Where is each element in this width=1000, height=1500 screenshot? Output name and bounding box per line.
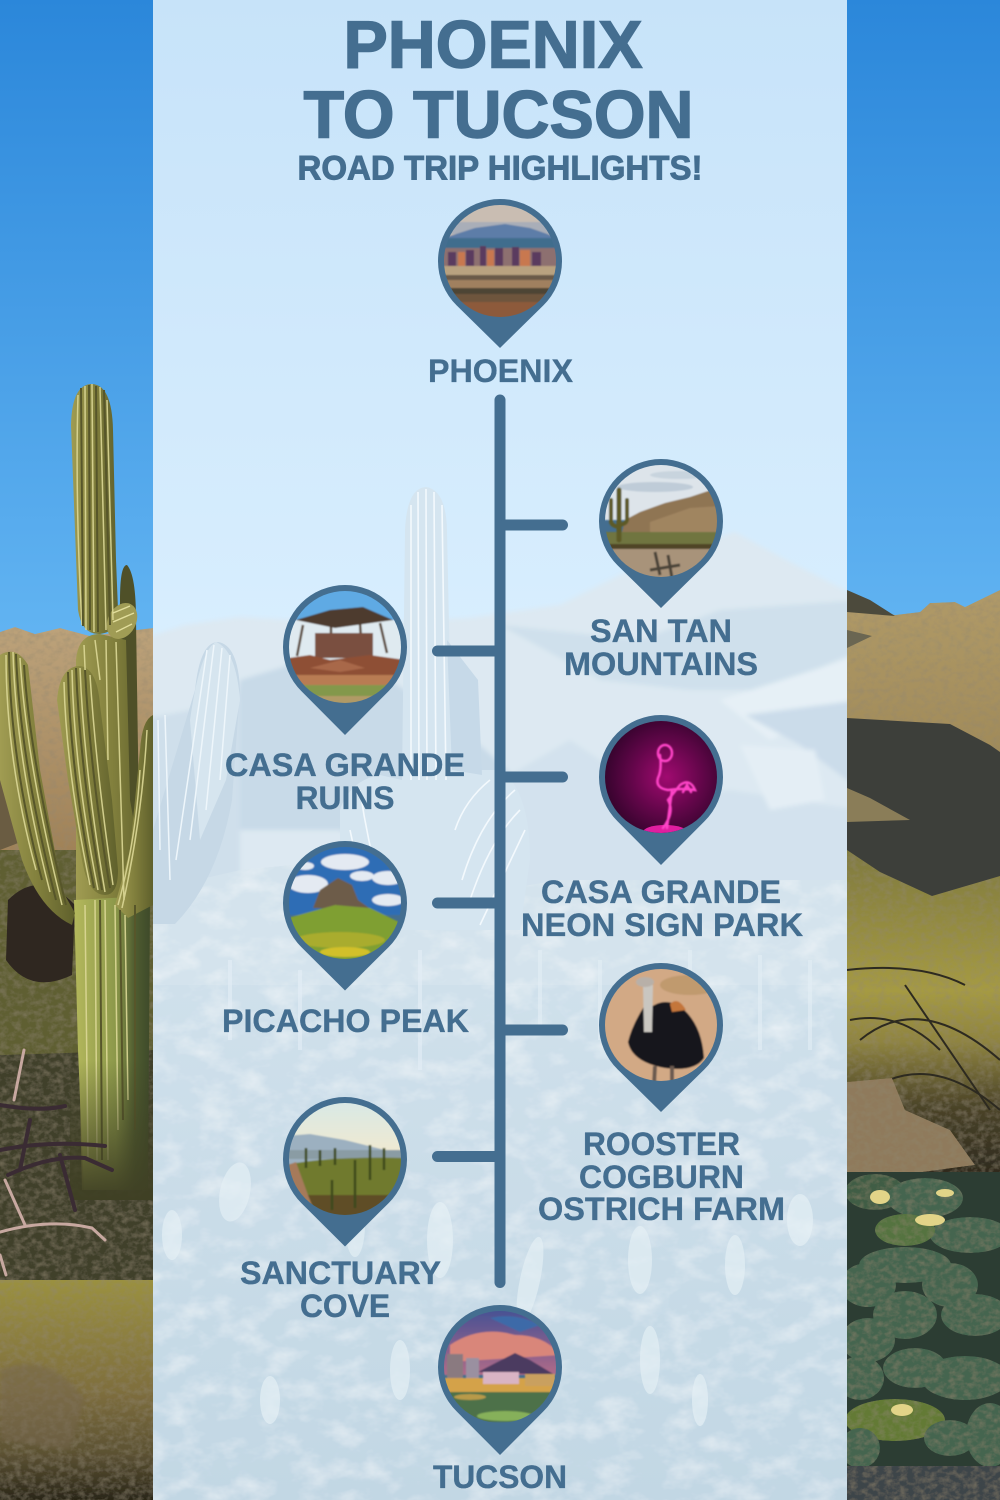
label: Rooster Cogburn Ostrich Farm: COGBURN	[579, 1159, 744, 1195]
label: Sanctuary Cove	[240, 1255, 441, 1324]
label: Picacho Peak: PICACHO PEAK	[222, 1003, 469, 1039]
label: Phoenix: PHOENIX	[428, 353, 574, 389]
label: Rooster Cogburn Ostrich Farm: OSTRICH FARM	[538, 1191, 785, 1227]
ghost saguaro centre	[340, 487, 530, 930]
label: Casa Grande Ruins: RUINS	[296, 780, 394, 816]
title: ROAD TRIP HIGHLIGHTS!	[298, 150, 702, 188]
title: TO TUCSON	[304, 78, 694, 152]
title	[298, 8, 702, 188]
panel: translucent route panel	[140, 0, 860, 1500]
label: Rooster Cogburn Ostrich Farm	[538, 1126, 785, 1227]
label: Tucson: TUCSON	[433, 1459, 567, 1495]
label: Casa Grande Neon Sign Park	[521, 874, 803, 943]
cholla	[847, 1078, 975, 1175]
right arm	[115, 715, 153, 918]
background: desert sky	[0, 0, 1000, 700]
timeline	[438, 400, 562, 1282]
highlights on pads	[870, 1189, 954, 1416]
label: San Tan Mountains: SAN TAN	[590, 613, 732, 649]
ghost saguaro left	[153, 642, 240, 924]
prickly pear cactus pads	[836, 1174, 1000, 1468]
middle arm	[57, 666, 118, 895]
hill shadow	[847, 718, 1000, 896]
ghost prickly pear pads	[162, 1160, 813, 1426]
pin: San Tan Mountains	[599, 459, 725, 608]
saguaro cactus	[0, 384, 153, 1200]
trunk	[76, 634, 133, 1187]
pin: Picacho Peak	[283, 841, 407, 990]
lower hillside and scrub	[847, 840, 1000, 1175]
pin: Tucson	[438, 1305, 562, 1455]
label: San Tan Mountains: MOUNTAINS	[564, 646, 758, 682]
label: Sanctuary Cove: SANCTUARY	[240, 1255, 441, 1291]
pin: Casa Grande Ruins	[283, 585, 407, 735]
ghost vertical cacti	[230, 950, 810, 1070]
ghost mountains	[153, 534, 847, 886]
label: Casa Grande Ruins	[225, 747, 465, 816]
label: Rooster Cogburn Ostrich Farm: ROOSTER	[583, 1126, 740, 1162]
icon: foreground branches	[0, 1050, 112, 1275]
textured foreground	[153, 985, 847, 1500]
label: San Tan Mountains	[564, 613, 758, 682]
tan mountain	[847, 590, 1000, 760]
pin: Rooster Cogburn Ostrich Farm	[599, 963, 723, 1112]
pin: Casa Grande Neon Sign Park	[599, 715, 723, 865]
title: PHOENIX	[344, 8, 643, 82]
cactus ribs	[6, 384, 147, 1160]
pin: Phoenix	[438, 199, 562, 348]
pin: Sanctuary Cove	[283, 1097, 407, 1246]
label: Casa Grande Neon Sign Park: CASA GRANDE	[541, 874, 781, 910]
label: Casa Grande Ruins: CASA GRANDE	[225, 747, 465, 783]
background: right desert scene	[836, 590, 1000, 1500]
left arm	[0, 652, 75, 925]
label: Casa Grande Neon Sign Park: NEON SIGN PARK	[521, 907, 803, 943]
upper column	[71, 384, 118, 634]
knob	[106, 603, 138, 639]
background: left desert scene	[0, 627, 153, 1500]
label: Sanctuary Cove: COVE	[300, 1288, 390, 1324]
